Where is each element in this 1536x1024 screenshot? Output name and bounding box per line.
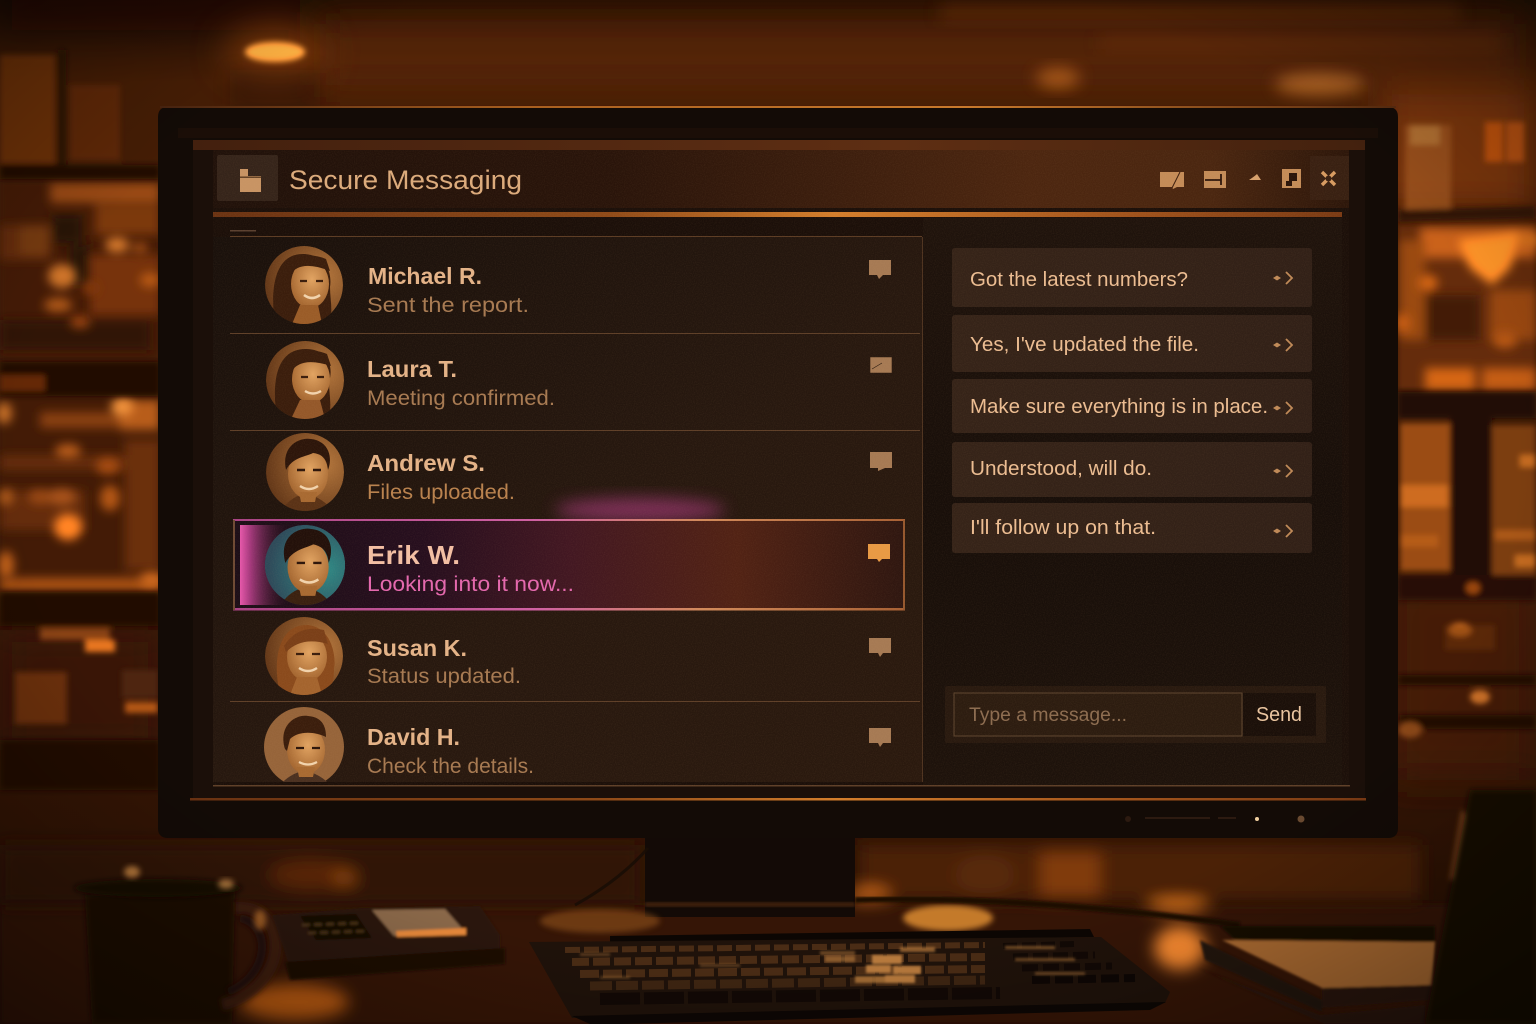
message input: Send (1256, 704, 1302, 726)
avatar: Laura T. (266, 341, 344, 419)
shelf left lower (0, 395, 164, 591)
icon: message (869, 728, 891, 747)
shelf right top windows (1398, 122, 1536, 222)
contact: David H. (264, 707, 891, 787)
name: Andrew S.: Andrew S. (367, 450, 485, 476)
message: I'll follow up on that.: I'll follow up on that. (970, 517, 1156, 539)
message: I'll follow up on that. (952, 503, 1312, 553)
desk phone (272, 906, 505, 980)
preview: Looking into it now...: Looking into it now... (367, 573, 574, 596)
message: Understood, will do. (952, 442, 1312, 497)
preview: Sent the report.: Sent the report. (367, 294, 529, 317)
avatar: Erik W. (265, 525, 345, 605)
screen lower edge (213, 785, 1350, 786)
shelf right lower (1398, 392, 1536, 738)
avatar: Susan K. (265, 617, 343, 695)
screen (190, 140, 1366, 800)
preview: Meeting confirmed.: Meeting confirmed. (367, 387, 555, 410)
preview: Status updated.: Status updated. (367, 665, 521, 688)
contact: Michael R. (265, 246, 891, 324)
message: Got the latest numbers? (952, 248, 1312, 307)
title bar (213, 150, 1349, 208)
contact: Laura T. (266, 341, 892, 419)
contact: Andrew S. (266, 433, 892, 511)
row dividers (230, 333, 920, 702)
shelf dividers and lower-left items (0, 50, 160, 790)
orange divider (213, 212, 1342, 217)
preview: Files uploaded.: Files uploaded. (367, 481, 515, 504)
message: Yes, I've updated the file. (952, 315, 1312, 372)
shelf right upper (1396, 225, 1536, 390)
icon: message (869, 260, 891, 279)
message: Got the latest numbers?: Got the latest numbers? (970, 269, 1188, 291)
title text: Secure Messaging (289, 165, 522, 195)
name: Erik W.: Erik W. (367, 540, 460, 570)
name: Susan K.: Susan K. (367, 635, 467, 661)
name: Michael R.: Michael R. (368, 263, 482, 289)
panel: conversation (923, 218, 1342, 785)
mug (74, 866, 276, 1024)
message: Understood, will do.: Understood, will do. (970, 458, 1152, 480)
name: David H.: David H. (367, 724, 460, 750)
desk surface and reflections (0, 905, 1536, 1024)
keyboard (529, 929, 1170, 1024)
message: Make sure everything is in place. (952, 379, 1312, 433)
avatar: Michael R. (265, 246, 343, 324)
message input (945, 686, 1326, 743)
monitor stand (540, 835, 1240, 933)
message input: Type a message... (969, 705, 1127, 726)
preview: Check the details.: Check the details. (367, 755, 534, 778)
icon: message (870, 452, 892, 471)
message: Yes, I've updated the file.: Yes, I've updated the file. (970, 334, 1199, 356)
avatar: David H. (264, 707, 344, 787)
avatar: Andrew S. (266, 433, 344, 511)
app icon: folder (217, 155, 278, 201)
icon: message (869, 638, 891, 657)
name: Laura T.: Laura T. (367, 356, 457, 382)
icon: message (870, 357, 892, 373)
contact: Erik W. (selected) (233, 519, 905, 610)
dark object on desk, right (1425, 790, 1536, 1024)
notebook (1198, 926, 1435, 1024)
shelf left upper (0, 180, 160, 360)
contact: Susan K. (265, 617, 891, 695)
monitor frame (158, 106, 1398, 838)
panel: contact list (213, 230, 923, 787)
toolbar icons (1160, 156, 1349, 200)
glow above selected row (555, 498, 725, 522)
message: Make sure everything is in place.: Make sure everything is in place. (970, 396, 1268, 418)
icon: message (active) (868, 544, 890, 562)
ceiling lights (225, 5, 1500, 110)
